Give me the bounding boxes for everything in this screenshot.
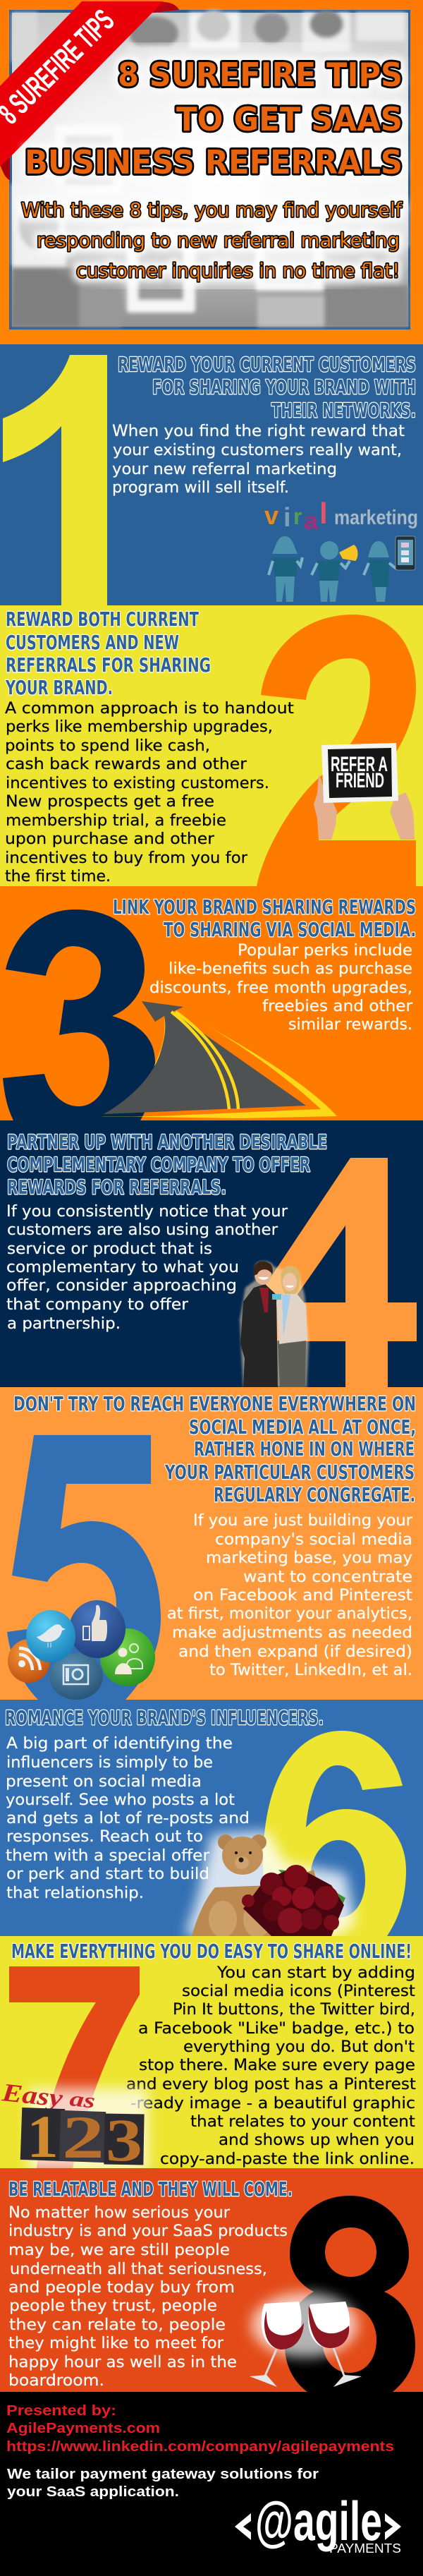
- body 7: -ready image - a beautiful graphic: [130, 2095, 415, 2112]
- body 8: they might like to meet for: [8, 2335, 224, 2352]
- body 5: and then expand (if desired): [178, 1643, 412, 1661]
- body 4: that company to offer: [6, 1296, 189, 1314]
- number 8: [285, 2196, 415, 2392]
- body 6: influencers is simply to be: [6, 1754, 213, 1772]
- icon: viral marketing: i: [283, 503, 291, 533]
- panel: tip 5: [0, 1387, 423, 1700]
- body 5: at first, monitor your analytics,: [167, 1605, 412, 1623]
- panel: tip 8: [0, 2168, 423, 2392]
- number 7: [9, 1966, 140, 2168]
- icon: easy as 123: as: [68, 2087, 97, 2113]
- body 8: and people today buy from: [8, 2279, 235, 2297]
- logo: agile payments: PAYMENTS: [329, 2541, 401, 2556]
- body 8: [8, 2204, 288, 2390]
- body 8: No matter how serious your: [8, 2204, 231, 2222]
- credits: [6, 2403, 394, 2455]
- body 5: company's social media: [215, 1531, 412, 1549]
- bubble: RSS: [8, 1639, 50, 1683]
- body 6: yourself. See who posts a lot: [6, 1791, 235, 1809]
- subtitle: With these 8 tips, you may find yourself: [21, 198, 403, 222]
- body 7: that relates to your content: [190, 2113, 415, 2131]
- icon: viral marketing: l: [319, 497, 328, 530]
- icon: viral marketing: [264, 497, 418, 602]
- bubble: camera: [49, 1653, 103, 1700]
- icon: easy as 123: 2: [62, 2103, 104, 2171]
- icon: megaphone: [339, 545, 358, 561]
- credits: AgilePayments.com: [6, 2421, 160, 2436]
- body 3: [149, 942, 413, 1034]
- body 6: present on social media: [6, 1773, 202, 1791]
- icon: social media bubbles: [8, 1600, 155, 1700]
- body 3: similar rewards.: [288, 1016, 412, 1034]
- photo frame: [9, 10, 410, 329]
- photo: business couple: [240, 1262, 309, 1387]
- panel: header: [0, 0, 423, 345]
- body 1: your new referral marketing: [112, 461, 337, 478]
- heading 2: REWARD BOTH CURRENT: [6, 607, 199, 631]
- body 5: want to concentrate: [243, 1568, 412, 1586]
- heading 1: [118, 353, 416, 422]
- icon: easy as 123: Easy: [0, 2078, 65, 2112]
- body 4: service or product that is: [7, 1240, 212, 1258]
- figure left: [269, 536, 302, 602]
- heading 4: [7, 1130, 327, 1199]
- body 6: or perk and start to build: [6, 1866, 209, 1883]
- number 6: [263, 1731, 406, 1936]
- panel: footer: [0, 2392, 423, 2576]
- body 8: they can relate to, people: [9, 2316, 226, 2334]
- body 8: underneath all that seriousness,: [10, 2261, 267, 2278]
- body 7: social media icons (Pinterest: [182, 1983, 415, 2000]
- body 2: incentives to existing customers.: [6, 775, 269, 792]
- body 1: [112, 423, 405, 497]
- body 7: stop there. Make sure every page: [139, 2057, 415, 2074]
- panel: tip 3: [0, 886, 423, 1120]
- body 2: A common approach is to handout: [5, 700, 294, 718]
- icon: phone: [396, 536, 415, 570]
- number 5: [7, 1435, 161, 1700]
- body 7: [126, 1964, 416, 2168]
- number 3: [3, 909, 155, 1120]
- heading 2: [5, 607, 211, 699]
- number 2: [257, 615, 416, 886]
- body 5: If you are just building your: [193, 1512, 413, 1530]
- subtitle: [21, 198, 403, 282]
- icon: wine glasses: [250, 2292, 362, 2387]
- body 8: industry is and your SaaS products: [8, 2223, 288, 2240]
- body 5: to Twitter, LinkedIn, et al.: [209, 1662, 412, 1679]
- body 8: happy hour as well as in the: [8, 2354, 237, 2371]
- bubble: thumbs up: [69, 1600, 125, 1658]
- body 3: like-benefits such as purchase: [168, 960, 412, 978]
- panel: tip 4: [0, 1120, 423, 1387]
- body 7: everything you do. But don't: [183, 2038, 415, 2056]
- icon: easy as 123: 3: [106, 2106, 142, 2174]
- icon: easy as 123: 1: [27, 2103, 59, 2170]
- title: [25, 56, 403, 181]
- woman: [272, 1266, 307, 1387]
- body 4: customers are also using another: [7, 1221, 278, 1239]
- body 2: cash back rewards and other: [6, 756, 247, 773]
- body 6: that relationship.: [6, 1885, 144, 1902]
- icon: viral marketing: r: [293, 504, 302, 529]
- body 4: If you consistently notice that your: [6, 1203, 288, 1221]
- body 7: copy-and-paste the link online.: [160, 2151, 415, 2168]
- panel: tip 7: [0, 1936, 423, 2174]
- icon: hands holding refer a friend tablet: [314, 743, 415, 840]
- body 2: the first time.: [5, 868, 111, 885]
- tagline: We tailor payment gateway solutions for: [7, 2467, 319, 2482]
- body 6: A big part of identifying the: [6, 1735, 233, 1753]
- body 1: program will sell itself.: [112, 479, 289, 497]
- subtitle: responding to new referral marketing: [37, 229, 400, 252]
- panel: tip 1: [0, 344, 423, 607]
- credits: Presented by:: [6, 2403, 116, 2419]
- tagline: your SaaS application.: [7, 2484, 179, 2500]
- body 7: and shows up when you: [219, 2131, 415, 2149]
- body 8: boardroom.: [8, 2372, 104, 2390]
- figure centre: [312, 541, 358, 602]
- body 5: marketing base, you may: [206, 1549, 412, 1567]
- bubble: twitter: [26, 1610, 75, 1662]
- body 8: may be, we are still people: [8, 2242, 230, 2259]
- heading 8: BE RELATABLE AND THEY WILL COME.: [8, 2177, 293, 2201]
- body 7: and every blog post has a Pinterest: [126, 2076, 416, 2093]
- body 4: [6, 1203, 288, 1333]
- body 4: offer, consider approaching: [6, 1277, 237, 1295]
- body 2: incentives to buy from you for: [5, 849, 248, 867]
- title: 8 SUREFIRE TIPS: [118, 56, 403, 94]
- right glass: [308, 2302, 362, 2387]
- icon: hands holding refer a friend tablet: FRIEND: [336, 769, 384, 792]
- icon: hands holding refer a friend tablet: REFER A: [331, 753, 388, 776]
- heading 2: CUSTOMERS AND NEW: [6, 631, 179, 654]
- body 3: discounts, free month upgrades,: [149, 979, 412, 997]
- body 6: [6, 1735, 250, 1902]
- body 7: You can start by adding: [216, 1964, 415, 1982]
- heading 2: YOUR BRAND.: [5, 676, 113, 699]
- bubble: green people: [100, 1628, 155, 1686]
- panel: tip 2: [0, 605, 423, 886]
- icon: viral marketing: v: [264, 501, 278, 530]
- body 6: them with a special offer: [6, 1847, 210, 1865]
- body 5: make adjustments as needed: [172, 1624, 412, 1642]
- body 2: upon purchase and other: [5, 830, 215, 848]
- subtitle: customer inquiries in no time flat!: [76, 259, 400, 282]
- heading 3: [113, 895, 416, 941]
- icon: road arrow: [100, 1001, 337, 1118]
- figure right: [364, 541, 396, 602]
- body 3: Popular perks include: [238, 942, 412, 960]
- body 6: and gets a lot of re-posts and: [6, 1810, 250, 1827]
- body 4: a partnership.: [7, 1315, 121, 1333]
- heading 2: REFERRALS FOR SHARING: [6, 653, 211, 677]
- icon: easy as 123: [0, 2078, 148, 2174]
- body 6: responses. Reach out to: [6, 1828, 203, 1846]
- body 7: a Facebook "Like" badge, etc.) to: [138, 2020, 415, 2038]
- body 4: complementary to what you: [6, 1259, 239, 1276]
- body 2: membership trial, a freebie: [6, 812, 226, 830]
- photo: teddy bear and roses: [185, 1831, 356, 1937]
- body 1: your existing customers really want,: [113, 442, 402, 459]
- body 2: perks like membership upgrades,: [6, 718, 273, 736]
- body 5: on Facebook and Pinterest: [193, 1587, 412, 1604]
- panel: tip 6: [0, 1700, 423, 1937]
- body 7: Pin It buttons, the Twitter bird,: [173, 2001, 415, 2019]
- body 1: When you find the right reward that: [112, 423, 405, 440]
- man: [240, 1262, 278, 1387]
- body 8: people they trust, people: [9, 2297, 217, 2315]
- body 2: [5, 700, 294, 885]
- roses: [242, 1865, 345, 1936]
- body 2: points to spend like cash,: [5, 737, 210, 755]
- ribbon: 8 surefire tips: [0, 1, 179, 180]
- number 4: [254, 1158, 417, 1387]
- credits: https://www.linkedin.com/company/agilepayments: [6, 2439, 394, 2455]
- heading 5: [13, 1392, 416, 1506]
- tagline: [7, 2467, 319, 2500]
- body 3: freebies and other: [262, 998, 413, 1015]
- left glass: [250, 2302, 304, 2387]
- number 1: [3, 355, 107, 605]
- body 2: New prospects get a free: [6, 793, 214, 811]
- title: TO GET SAAS: [176, 100, 403, 138]
- icon: viral marketing: a: [304, 506, 319, 535]
- bear: [192, 1834, 317, 1937]
- body 5: [167, 1512, 413, 1679]
- title: BUSINESS REFERRALS: [25, 143, 403, 181]
- heading 4: REWARDS FOR REFERRALS.: [7, 1175, 226, 1199]
